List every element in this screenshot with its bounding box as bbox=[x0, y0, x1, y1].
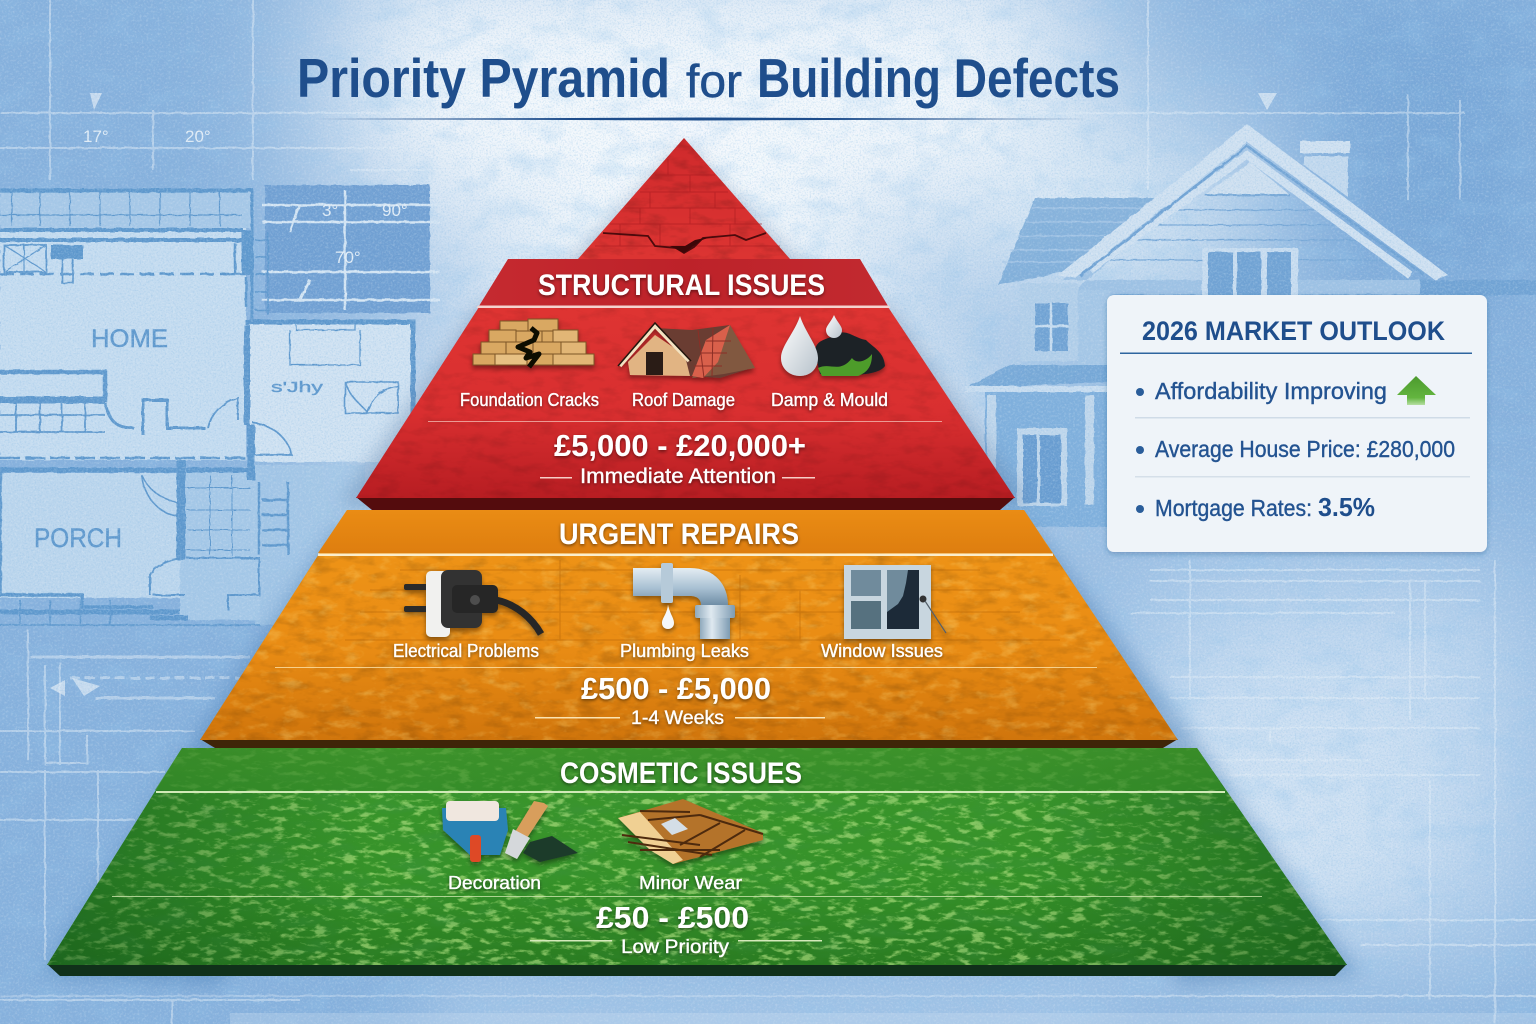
panel: cosmetic issues tier bbox=[47, 748, 1347, 976]
background: house drawing bbox=[965, 124, 1536, 527]
row: mortgage rates bbox=[1136, 492, 1375, 522]
label: roof damage: Roof Damage bbox=[632, 390, 735, 410]
background: floor plan labels: HOME bbox=[91, 325, 168, 353]
green banner bbox=[155, 748, 1225, 790]
icon: paint tray and brush bbox=[442, 801, 578, 862]
bottom pale strip bbox=[230, 1013, 1536, 1024]
background: floor plan labels: 3° bbox=[322, 201, 338, 220]
orange banner bbox=[318, 510, 1052, 553]
red tier base edge bbox=[356, 497, 1015, 510]
panel: structural issues tier bbox=[340, 138, 1030, 510]
icon: electrical plug bbox=[404, 570, 541, 637]
row: average house price: Average House Price: £280,000 bbox=[1155, 436, 1455, 462]
red tier divider bbox=[428, 421, 942, 422]
row: mortgage rates: 3.5% bbox=[1318, 492, 1375, 522]
title: Priority Pyramid bbox=[297, 47, 670, 109]
card heading: 2026 MARKET OUTLOOK bbox=[1142, 316, 1445, 346]
label: foundation cracks: Foundation Cracks bbox=[460, 390, 599, 410]
background: floor plan labels: 70° bbox=[335, 248, 361, 267]
panel: 2026 market outlook card bbox=[1107, 295, 1487, 552]
heading: cosmetic issues: COSMETIC ISSUES bbox=[560, 757, 802, 790]
icon: damp and mould bbox=[781, 315, 885, 376]
cost: structural: £5,000 - £20,000+ bbox=[554, 428, 806, 463]
green tier divider bbox=[112, 896, 1262, 897]
row: affordability improving bbox=[1136, 376, 1436, 405]
row: mortgage rates: Mortgage Rates: bbox=[1155, 495, 1312, 521]
orange tier divider bbox=[275, 667, 1097, 668]
red apex with cracked brick bbox=[578, 138, 790, 259]
heading: urgent repairs: URGENT REPAIRS bbox=[559, 518, 799, 551]
label: decoration: Decoration bbox=[448, 873, 541, 893]
background: blueprint marker triangles bbox=[50, 93, 1277, 696]
background: floor plan labels bbox=[34, 127, 408, 553]
panel: urgent repairs tier bbox=[200, 510, 1178, 748]
label: minor wear: Minor Wear bbox=[639, 873, 742, 893]
background: floor plan labels: s'Jhy bbox=[271, 379, 324, 396]
heading: structural issues: STRUCTURAL ISSUES bbox=[538, 269, 825, 302]
timing: immediate attention: Immediate Attention bbox=[580, 465, 776, 488]
label: window issues: Window Issues bbox=[821, 641, 943, 661]
title bbox=[297, 47, 1120, 120]
background: floor plan labels: 90° bbox=[382, 201, 408, 220]
background: floor plan labels: 20° bbox=[185, 127, 211, 146]
green tier base edge bbox=[47, 964, 1347, 976]
red tier body bbox=[356, 307, 1015, 498]
timing: low priority: Low Priority bbox=[621, 937, 730, 958]
icon: roof damage bbox=[618, 323, 755, 378]
background: floor plan labels: PORCH bbox=[34, 523, 122, 553]
label: damp and mould: Damp & Mould bbox=[771, 390, 888, 410]
cost: urgent: £500 - £5,000 bbox=[581, 671, 771, 706]
background: floor plan drawing bbox=[0, 190, 413, 625]
orange tier base edge bbox=[200, 739, 1178, 748]
background: floor plan rooms bbox=[0, 185, 440, 625]
timing: one to four weeks: 1-4 Weeks bbox=[631, 708, 724, 729]
title: Building Defects bbox=[757, 47, 1120, 109]
orange tier body bbox=[200, 510, 1178, 740]
icon: worn floorboards bbox=[618, 799, 763, 864]
icon: broken window bbox=[844, 565, 946, 639]
orange brick texture bbox=[345, 560, 1060, 640]
title: for bbox=[686, 55, 742, 107]
label: electrical problems: Electrical Problems bbox=[393, 641, 539, 661]
cost: cosmetic: £50 - £500 bbox=[596, 900, 749, 935]
row: affordability improving: Affordability Improving bbox=[1155, 378, 1387, 404]
label: plumbing leaks: Plumbing Leaks bbox=[620, 641, 749, 661]
red banner bbox=[479, 259, 888, 306]
icon: foundation cracks bbox=[473, 319, 594, 367]
soft shadow of red tier bbox=[340, 145, 1030, 505]
icon: plumbing leak bbox=[633, 563, 735, 639]
green tier body bbox=[47, 748, 1347, 965]
background: floor plan labels: 17° bbox=[83, 127, 109, 146]
pyramid ground shadow bbox=[40, 520, 1360, 985]
